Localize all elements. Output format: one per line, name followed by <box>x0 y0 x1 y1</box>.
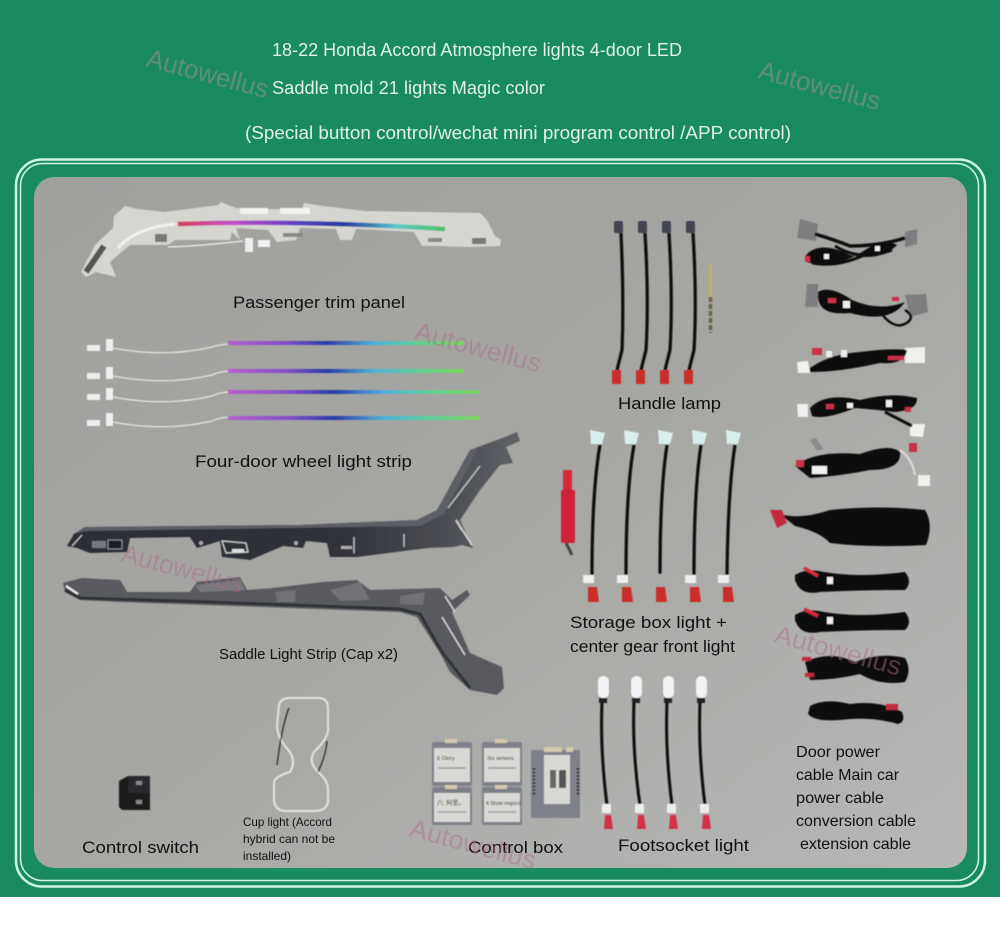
watermarks: Autowellus <box>411 316 545 378</box>
foot light 4 <box>696 676 711 829</box>
strip 4 <box>87 413 480 427</box>
title block: (Special button control/wechat mini program control /APP control) <box>245 123 791 143</box>
title block: Saddle mold 21 lights Magic color <box>272 78 545 98</box>
harness 9 <box>802 656 908 683</box>
part: passenger trim panel <box>81 202 501 277</box>
light 5 <box>718 430 741 602</box>
harness 8 <box>795 609 909 633</box>
module: Six senses <box>482 739 522 786</box>
part: four-door wheel light strips <box>87 339 480 427</box>
strip 1 <box>87 339 464 353</box>
part: handle lamp cables and drill bit <box>612 221 712 384</box>
label: door power cable list: cable Main car <box>796 767 900 784</box>
module: third card <box>432 785 472 825</box>
watermarks: Autowellus <box>143 43 272 104</box>
watermarks: Autowellus <box>406 813 540 875</box>
panel: product background <box>34 177 967 868</box>
label: passenger trim panel: Passenger trim panel <box>233 293 405 312</box>
label: cup light: installed) <box>243 849 291 863</box>
foot light 3 <box>663 676 678 829</box>
strip 3 <box>87 388 480 402</box>
double frame <box>16 160 985 886</box>
label: door power cable list: extension cable <box>800 836 911 853</box>
label: cup light: Cup light (Accord <box>243 815 332 829</box>
label: saddle light strip: Saddle Light Strip (Cap x2) <box>219 647 398 663</box>
label: door power cable list: power cable <box>796 790 884 807</box>
harness 10 <box>808 701 903 724</box>
harness 7 <box>795 568 909 593</box>
watermarks: Autowellus <box>118 538 247 599</box>
module: 6 Glory <box>432 739 472 786</box>
light 2 <box>617 430 639 602</box>
module: third card: 六. 阿里。 <box>437 799 464 807</box>
strip 2 <box>87 367 464 381</box>
lamp 1 <box>612 221 623 384</box>
harness 4 <box>797 395 925 437</box>
harness 1 <box>797 219 917 264</box>
module: 6 Glory: 6 Glory <box>437 756 455 762</box>
harness 2 <box>805 284 928 325</box>
light 3 <box>656 430 673 602</box>
label: door power cable list <box>796 744 916 853</box>
module: Show respect: 4 Show respect <box>486 801 521 807</box>
red hole saw <box>561 470 575 555</box>
part: control box modules <box>432 739 580 825</box>
label: footsocket light: Footsocket light <box>618 836 749 855</box>
light 4 <box>685 430 707 602</box>
control box unit <box>531 747 580 818</box>
part: upper saddle strip <box>67 432 520 560</box>
part: footsocket lights <box>598 676 711 829</box>
light 1 <box>583 430 605 602</box>
harness 5 <box>795 438 930 486</box>
watermarks: Autowellus <box>755 55 884 116</box>
icon: control switch <box>119 776 150 810</box>
part: wiring harnesses <box>770 219 930 724</box>
part: cup light ring <box>274 698 328 811</box>
label: handle lamp: Handle lamp <box>618 394 721 413</box>
label: storage box light: center gear front light <box>570 637 735 656</box>
module: Six senses: Six senses <box>487 756 514 762</box>
harness 6: big bundle <box>770 508 930 546</box>
label: control box: Control box <box>468 838 564 857</box>
part: storage box lights <box>561 430 741 602</box>
harness 3 <box>797 347 925 373</box>
watermarks <box>118 43 905 875</box>
lamp 4 <box>684 221 695 384</box>
lamp 3 <box>660 221 671 384</box>
part: lower saddle strip <box>63 577 504 695</box>
label: cup light <box>243 815 335 863</box>
foot light 1 <box>598 676 613 829</box>
label: storage box light: Storage box light + <box>570 613 727 632</box>
watermarks: Autowellus <box>771 619 905 681</box>
label: cup light: hybrid can not be <box>243 832 335 846</box>
lamp 2 <box>636 221 647 384</box>
label: storage box light <box>570 613 735 656</box>
label: door power cable list: conversion cable <box>796 813 916 830</box>
label: four-door wheel light strip: Four-door wheel light strip <box>195 452 412 471</box>
foot light 2 <box>631 676 646 829</box>
drill bit <box>709 265 712 333</box>
module: Show respect <box>482 785 522 825</box>
title block <box>245 40 791 143</box>
title block: 18-22 Honda Accord Atmosphere lights 4-door LED <box>272 40 682 60</box>
label: door power cable list: Door power <box>796 744 881 761</box>
label: control switch: Control switch <box>82 838 199 857</box>
